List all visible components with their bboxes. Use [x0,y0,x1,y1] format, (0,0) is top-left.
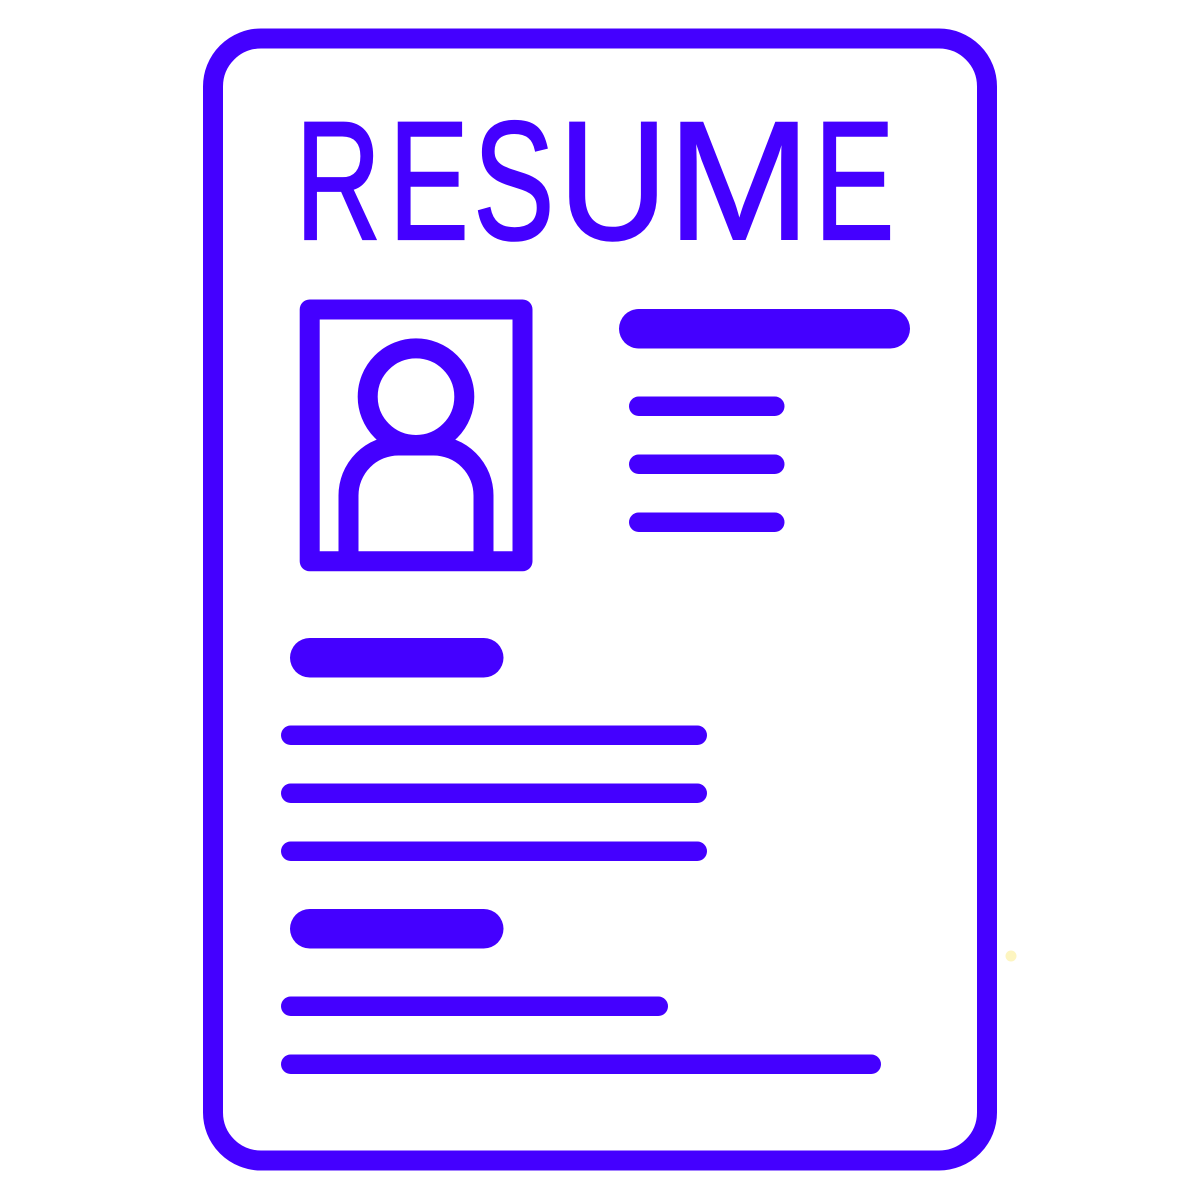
title: R [295,86,381,275]
title: M [667,87,811,276]
section one lines [281,726,707,861]
section two lines [281,996,881,1074]
section one heading bar [290,638,504,678]
small yellow dot [1006,950,1016,962]
icon: portrait photo [310,310,522,561]
name heading bar [619,309,910,348]
contact lines [629,396,784,532]
title: U [558,86,667,275]
title: E [814,87,894,276]
section two heading bar [290,909,504,948]
page outline [213,38,987,1160]
title: S [473,87,554,276]
title [295,86,894,276]
title: E [389,87,469,276]
